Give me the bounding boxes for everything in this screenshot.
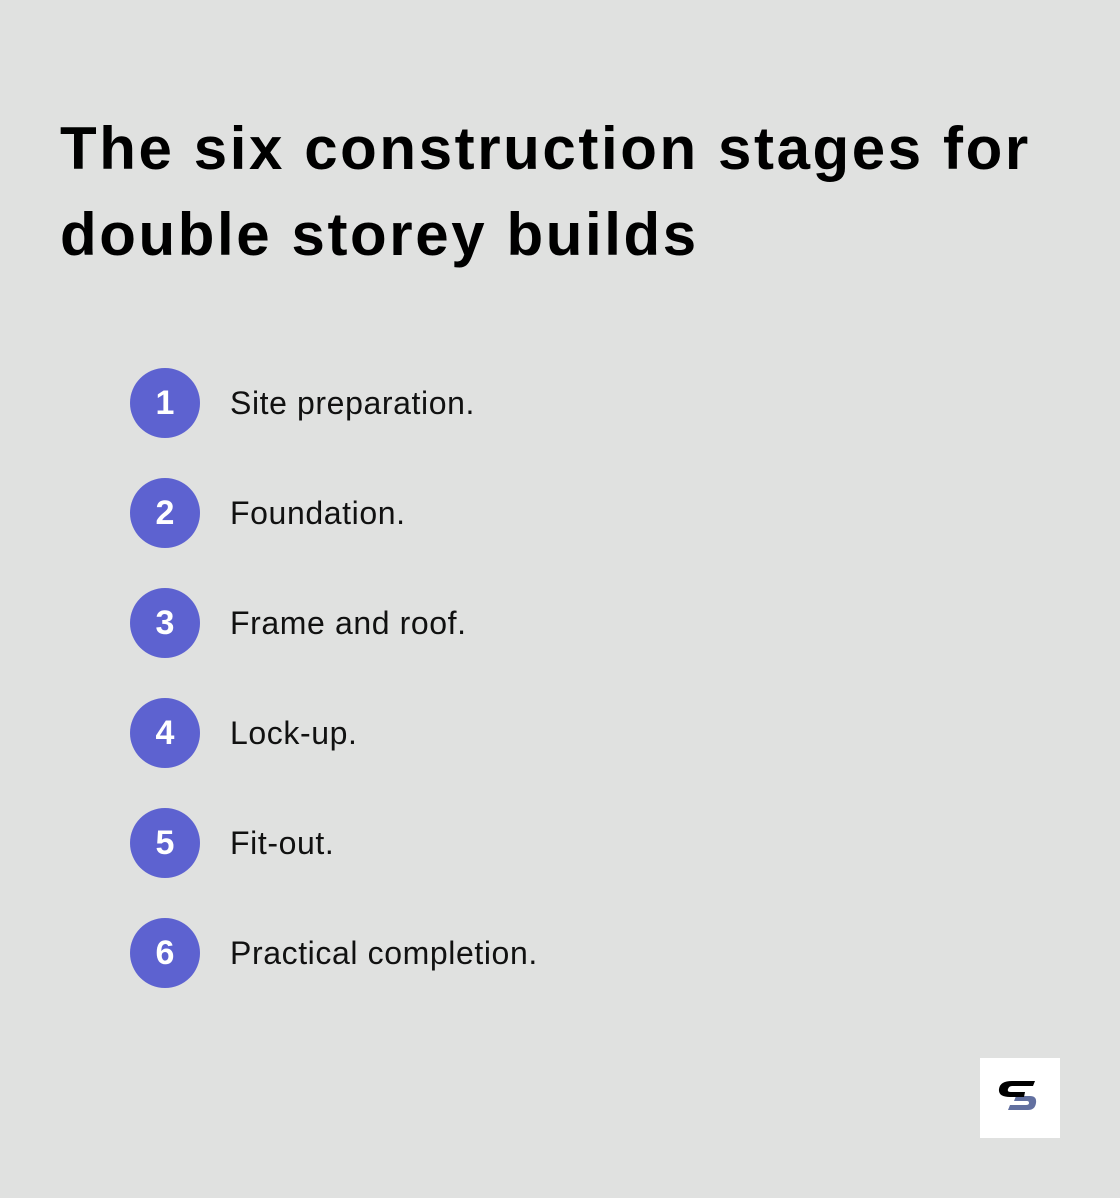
item 1: Site preparation. bbox=[230, 385, 475, 421]
item 5: 5 bbox=[156, 824, 174, 862]
item 6: 6 bbox=[156, 934, 174, 972]
item 3: Frame and roof. bbox=[230, 605, 467, 641]
item 1: 1 bbox=[156, 384, 174, 422]
item 3: 3 bbox=[156, 604, 174, 642]
item 6 bbox=[130, 918, 538, 988]
item 1 bbox=[130, 368, 475, 438]
item 4 bbox=[130, 698, 358, 768]
item 4: Lock-up. bbox=[230, 715, 358, 751]
item 2 bbox=[130, 478, 406, 548]
item 4: 4 bbox=[156, 714, 174, 752]
item 6: Practical completion. bbox=[230, 935, 538, 971]
item 3 bbox=[130, 588, 467, 658]
item 2: Foundation. bbox=[230, 495, 406, 531]
title: The six construction stages for double storey builds bbox=[60, 115, 1031, 268]
item 5 bbox=[130, 808, 334, 878]
logo bbox=[980, 1058, 1060, 1138]
item 5: Fit-out. bbox=[230, 825, 334, 861]
item 2: 2 bbox=[156, 494, 174, 532]
